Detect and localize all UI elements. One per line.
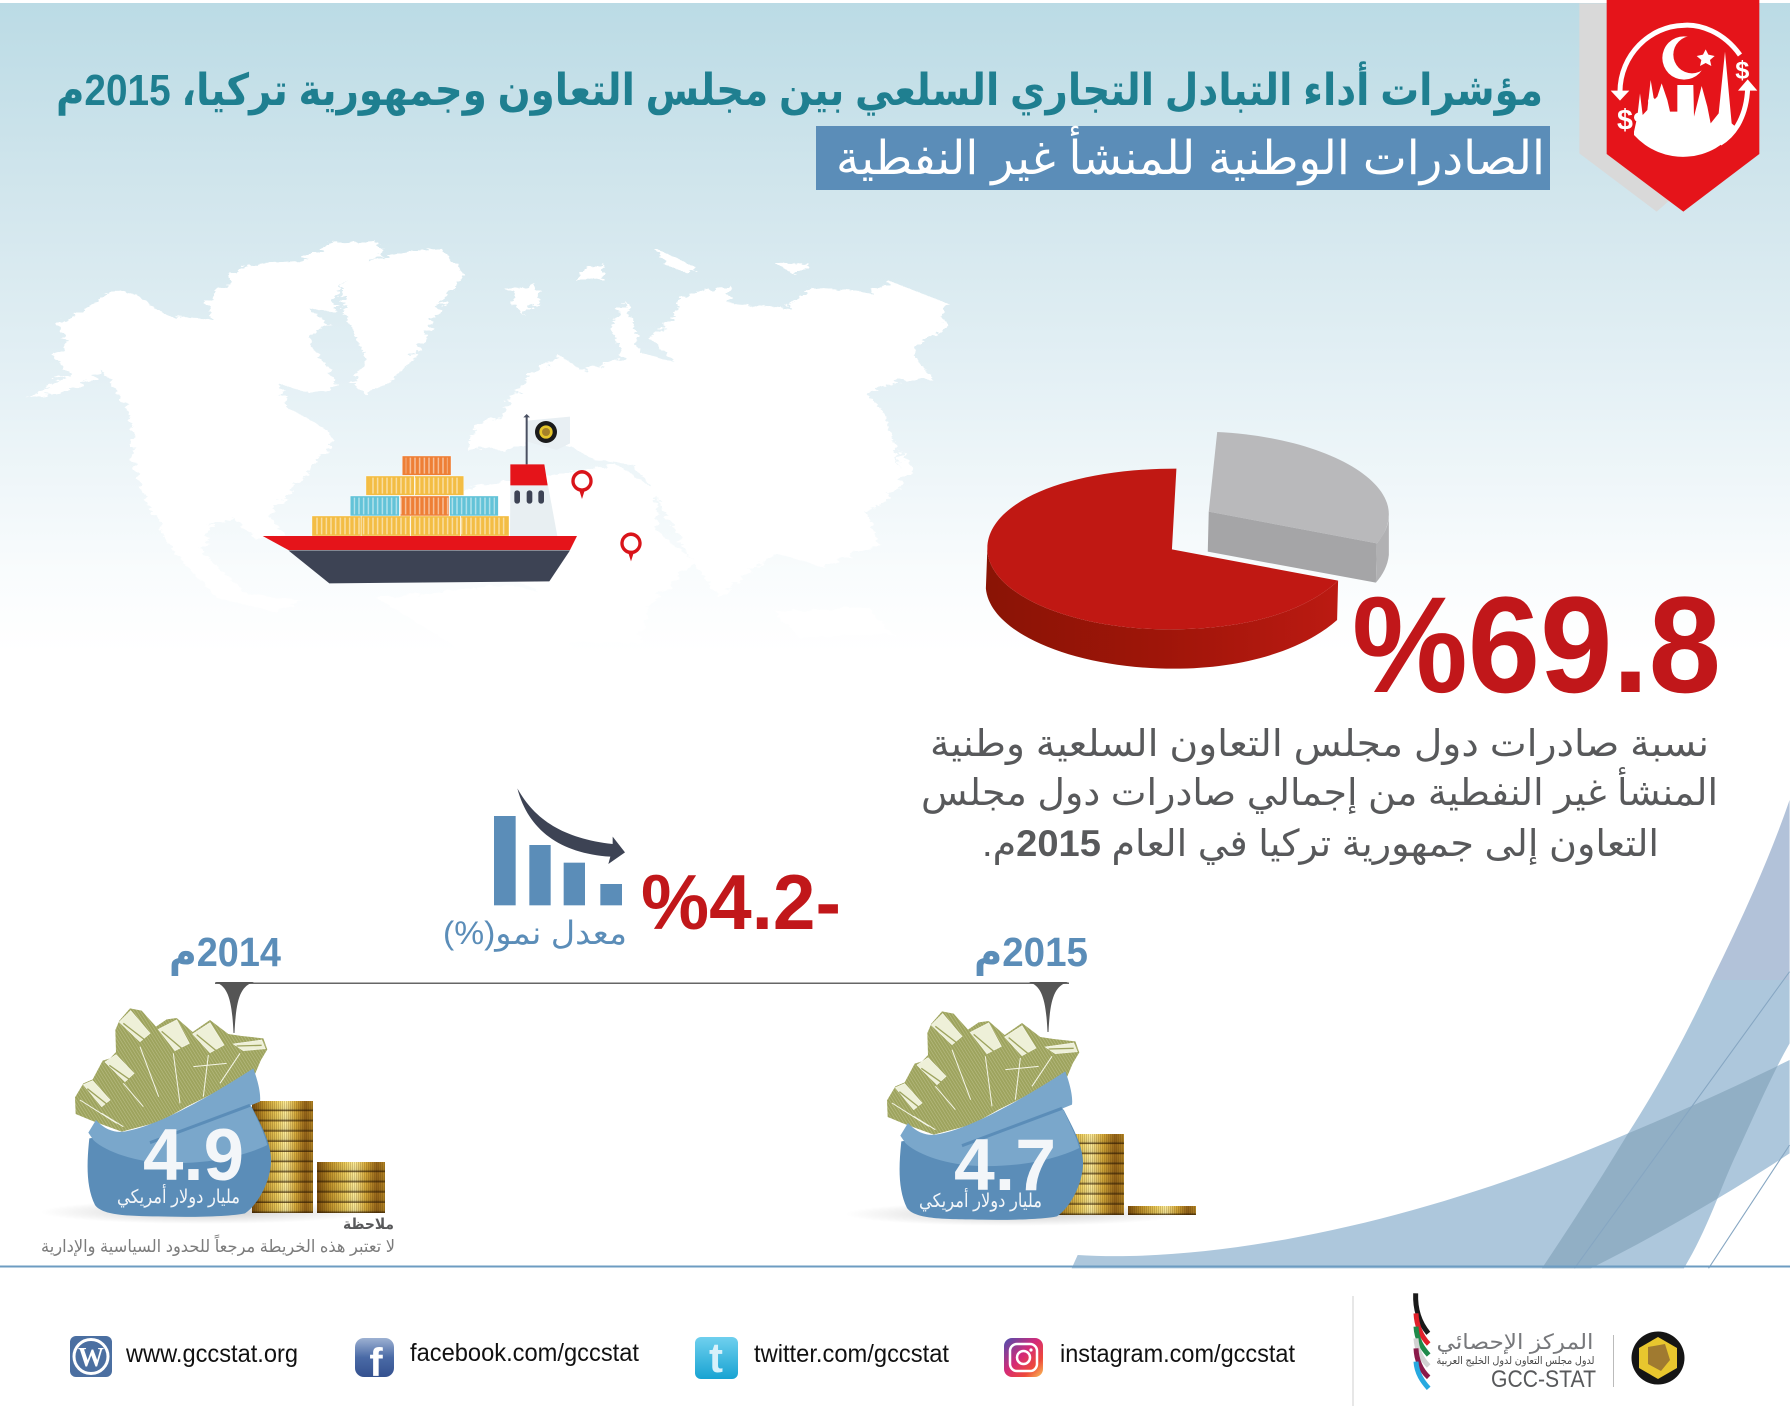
description text: المنشأ غير النفطية من إجمالي صادرات دول مجلس (921, 767, 1718, 814)
logo Arabic name: المركز الإحصائي (1436, 1331, 1594, 1354)
facebook link (355, 1338, 639, 1385)
website link (70, 1336, 298, 1377)
swoosh tall upper (1712, 800, 1790, 980)
swoosh tall lower (1542, 980, 1790, 1268)
mast (523, 414, 530, 464)
sack (88, 1068, 271, 1217)
icon: facebook (355, 1338, 394, 1385)
description text (921, 723, 1718, 865)
flag (527, 417, 570, 450)
banner shadow (1579, 3, 1670, 212)
description text: نسبة صادرات دول مجلس التعاون السلعية وطنية (930, 723, 1709, 765)
dollar left: $ (1617, 104, 1633, 136)
background gradient (0, 3, 1790, 653)
growth rate label: معدل نمو(%) (443, 915, 627, 952)
cargo ship (263, 414, 577, 583)
banner ribbon (1607, 0, 1759, 212)
subtitle bar: الصادرات الوطنية للمنشأ غير النفطية (836, 125, 1545, 186)
instagram link (1004, 1338, 1295, 1377)
icon: twitter (695, 1334, 738, 1381)
footer vertical divider (1352, 1296, 1354, 1406)
sack (900, 1071, 1083, 1220)
icon: wordpress (70, 1336, 112, 1377)
cash bills (887, 1011, 1079, 1135)
coins tall stack (1050, 1134, 1124, 1215)
twitter link (695, 1334, 949, 1381)
note heading: ملاحظة (343, 1216, 394, 1233)
containers (312, 456, 509, 536)
unit label: مليار دولار أمريكي (117, 1184, 240, 1208)
description text: التعاون إلى جمهورية تركيا في العام 2015م. (982, 823, 1659, 865)
decorative swoosh shapes (1072, 800, 1790, 1268)
year 2014 label: 2014م (169, 929, 281, 977)
pie grey slice (1209, 432, 1389, 543)
GCC-STAT logo (1416, 1293, 1684, 1393)
value 4.9: 4.9 (143, 1115, 244, 1196)
city skyline (1634, 52, 1737, 157)
title: مؤشرات أداء التبادل التجاري السلعي بين مجلس التعاون وجمهورية تركيا، 2015م (56, 61, 1543, 116)
icon: facebook: f (369, 1341, 383, 1385)
logo subtitle: لدول مجلس التعاون لدول الخليج العربية (1436, 1355, 1594, 1367)
GCC emblem (535, 421, 557, 443)
hull (263, 536, 577, 550)
money bag 2015 (845, 1011, 1196, 1226)
growth rate value: %4.2- (641, 858, 841, 946)
circular arrows (1620, 25, 1748, 143)
money bag 2014 (40, 1008, 385, 1224)
unit label: مليار دولار أمريكي (919, 1188, 1042, 1212)
logo ribbon (1416, 1293, 1429, 1388)
pie red side (986, 548, 1338, 669)
map pins (571, 470, 642, 561)
growth bar icon (494, 788, 625, 905)
footer divider (0, 1266, 1790, 1268)
icon: instagram (1004, 1338, 1043, 1377)
note text: لا تعتبر هذه الخريطة مرجعاً للحدود السياسية والإدارية (41, 1233, 395, 1256)
cash bills (75, 1008, 267, 1132)
swoosh overlap (1542, 1066, 1778, 1268)
dollar right: $ (1735, 57, 1749, 85)
icon: wordpress: W (78, 1342, 104, 1372)
world map (29, 241, 948, 696)
coins short stack (317, 1162, 385, 1213)
arrow heads (1611, 79, 1757, 101)
bridge tower (510, 485, 557, 536)
GCC emblem (1632, 1332, 1684, 1384)
year 2015 label: 2015م (974, 929, 1088, 977)
69.8 percent value: %69.8 (1352, 569, 1721, 722)
single coin (1128, 1206, 1196, 1215)
pie red slice 69.8% (987, 469, 1338, 629)
icon: twitter: t (709, 1334, 723, 1381)
crescent and star (1662, 36, 1715, 80)
logo GCC-STAT: GCC-STAT (1491, 1366, 1596, 1393)
facebook link: facebook.com/gccstat (410, 1339, 639, 1367)
timeline bracket (215, 982, 1069, 1033)
3D pie chart (986, 432, 1389, 669)
down arrow (517, 788, 625, 864)
coins tall stack (252, 1101, 313, 1213)
website link: www.gccstat.org (125, 1340, 298, 1368)
swoosh band (1072, 1060, 1790, 1268)
instagram link: instagram.com/gccstat (1060, 1340, 1295, 1368)
corner banner with Turkey and GCC icon (1579, 0, 1759, 212)
twitter link: twitter.com/gccstat (754, 1340, 949, 1368)
value 4.7: 4.7 (954, 1125, 1056, 1206)
